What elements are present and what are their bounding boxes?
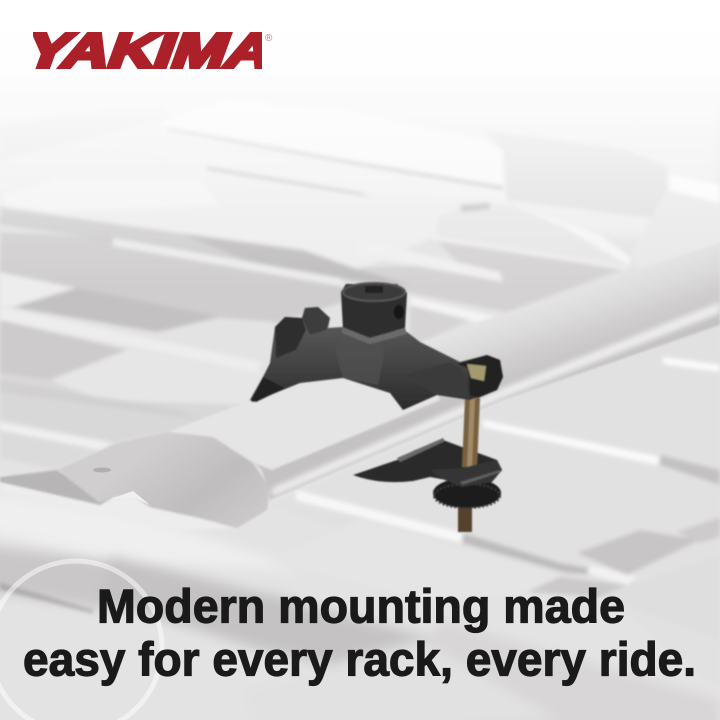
- bar end cap: [57, 432, 270, 528]
- bolt end: [457, 355, 503, 398]
- logo: [33, 32, 272, 69]
- headline: Modern mounting made: [97, 580, 625, 632]
- thumb wheel: [433, 478, 501, 508]
- product: mount clamp: [250, 283, 503, 532]
- logo: ®: [265, 33, 273, 44]
- faint circle badge: [0, 561, 162, 720]
- lower plate: [353, 440, 502, 483]
- crossbar: [0, 243, 720, 528]
- headline: easy for every rack, every ride.: [23, 632, 696, 686]
- tube socket: [341, 284, 407, 338]
- logo: YAKIMA: [18, 23, 284, 78]
- headline: [23, 580, 696, 686]
- clamp body: [250, 307, 503, 410]
- threaded rod: [462, 398, 480, 467]
